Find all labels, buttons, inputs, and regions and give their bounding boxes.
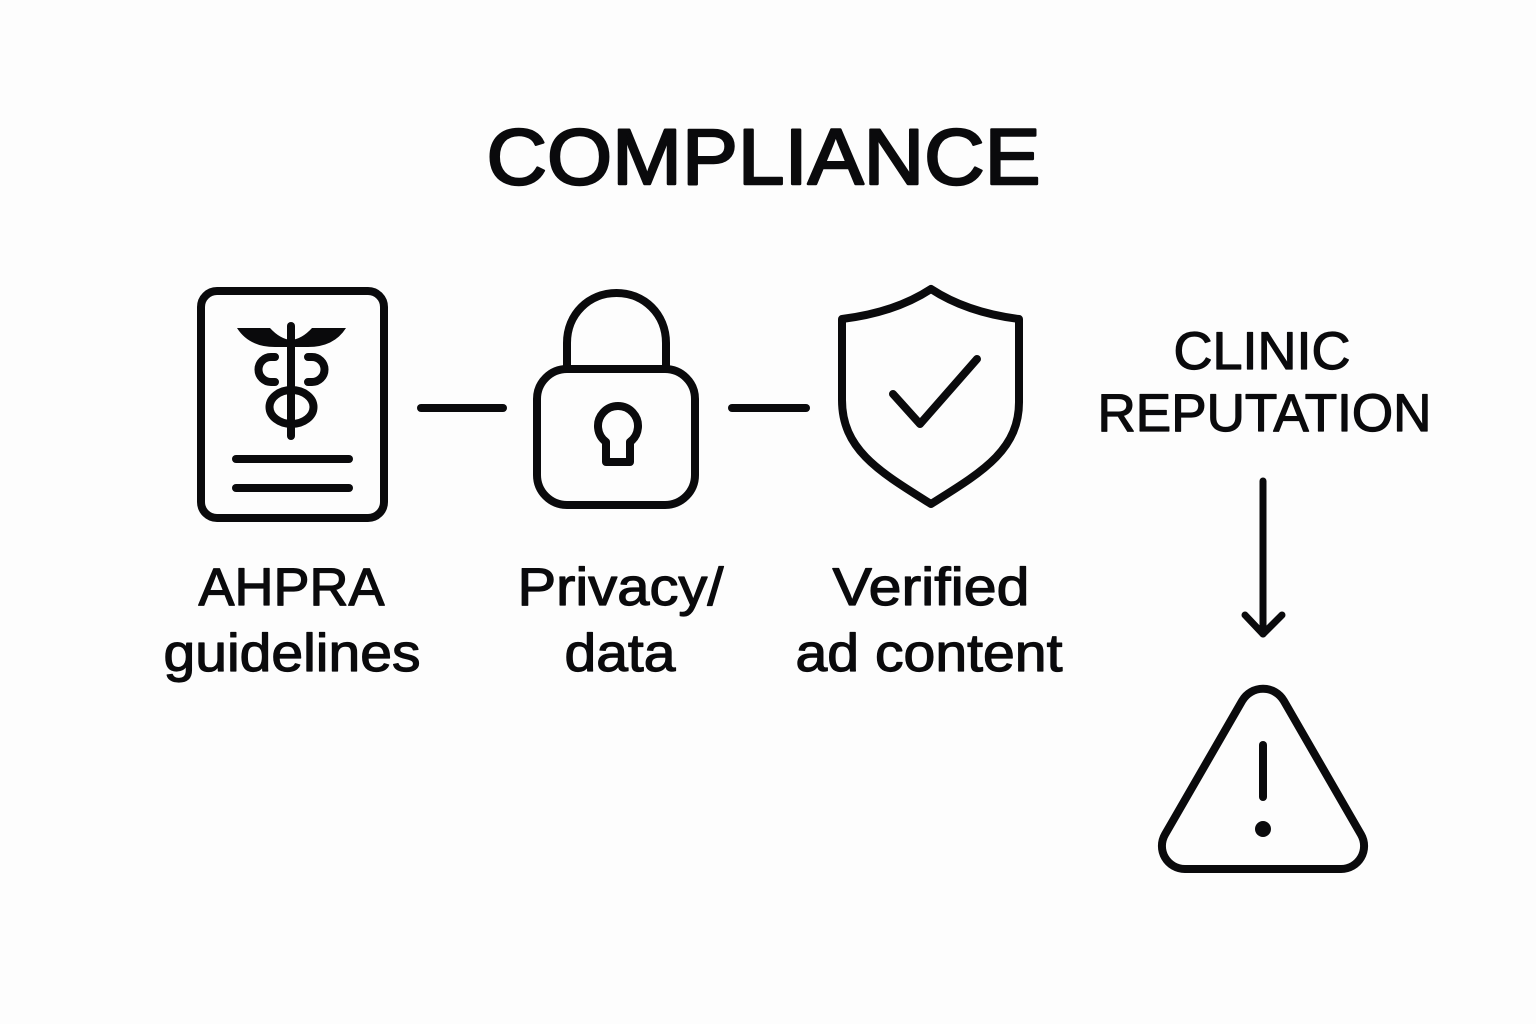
arrow: reputation to warning [1245,481,1282,634]
label: clinic reputation: CLINIC [1174,322,1350,381]
label: AHPRA guidelines: guidelines [164,624,420,683]
label: clinic reputation: REPUTATION [1098,384,1432,443]
label: Privacy/data: data [564,624,676,683]
label: Privacy/data: Privacy/ [518,558,724,617]
icon: padlock [537,293,695,505]
icon: warning triangle [1162,689,1364,869]
label: AHPRA guidelines [164,558,420,683]
connector: lock to shield [732,404,806,412]
label: Verified ad content [796,558,1063,683]
label: clinic reputation [1098,322,1432,443]
icon: shield with check mark [842,289,1019,504]
connector: document to lock [421,404,503,412]
icon: AHPRA document with caduceus [201,291,384,518]
label: Privacy/data [518,558,724,683]
label: Verified ad content: ad content [796,624,1063,683]
label: Verified ad content: Verified [832,558,1030,617]
title: COMPLIANCE [486,112,1040,201]
label: AHPRA guidelines: AHPRA [198,558,385,617]
